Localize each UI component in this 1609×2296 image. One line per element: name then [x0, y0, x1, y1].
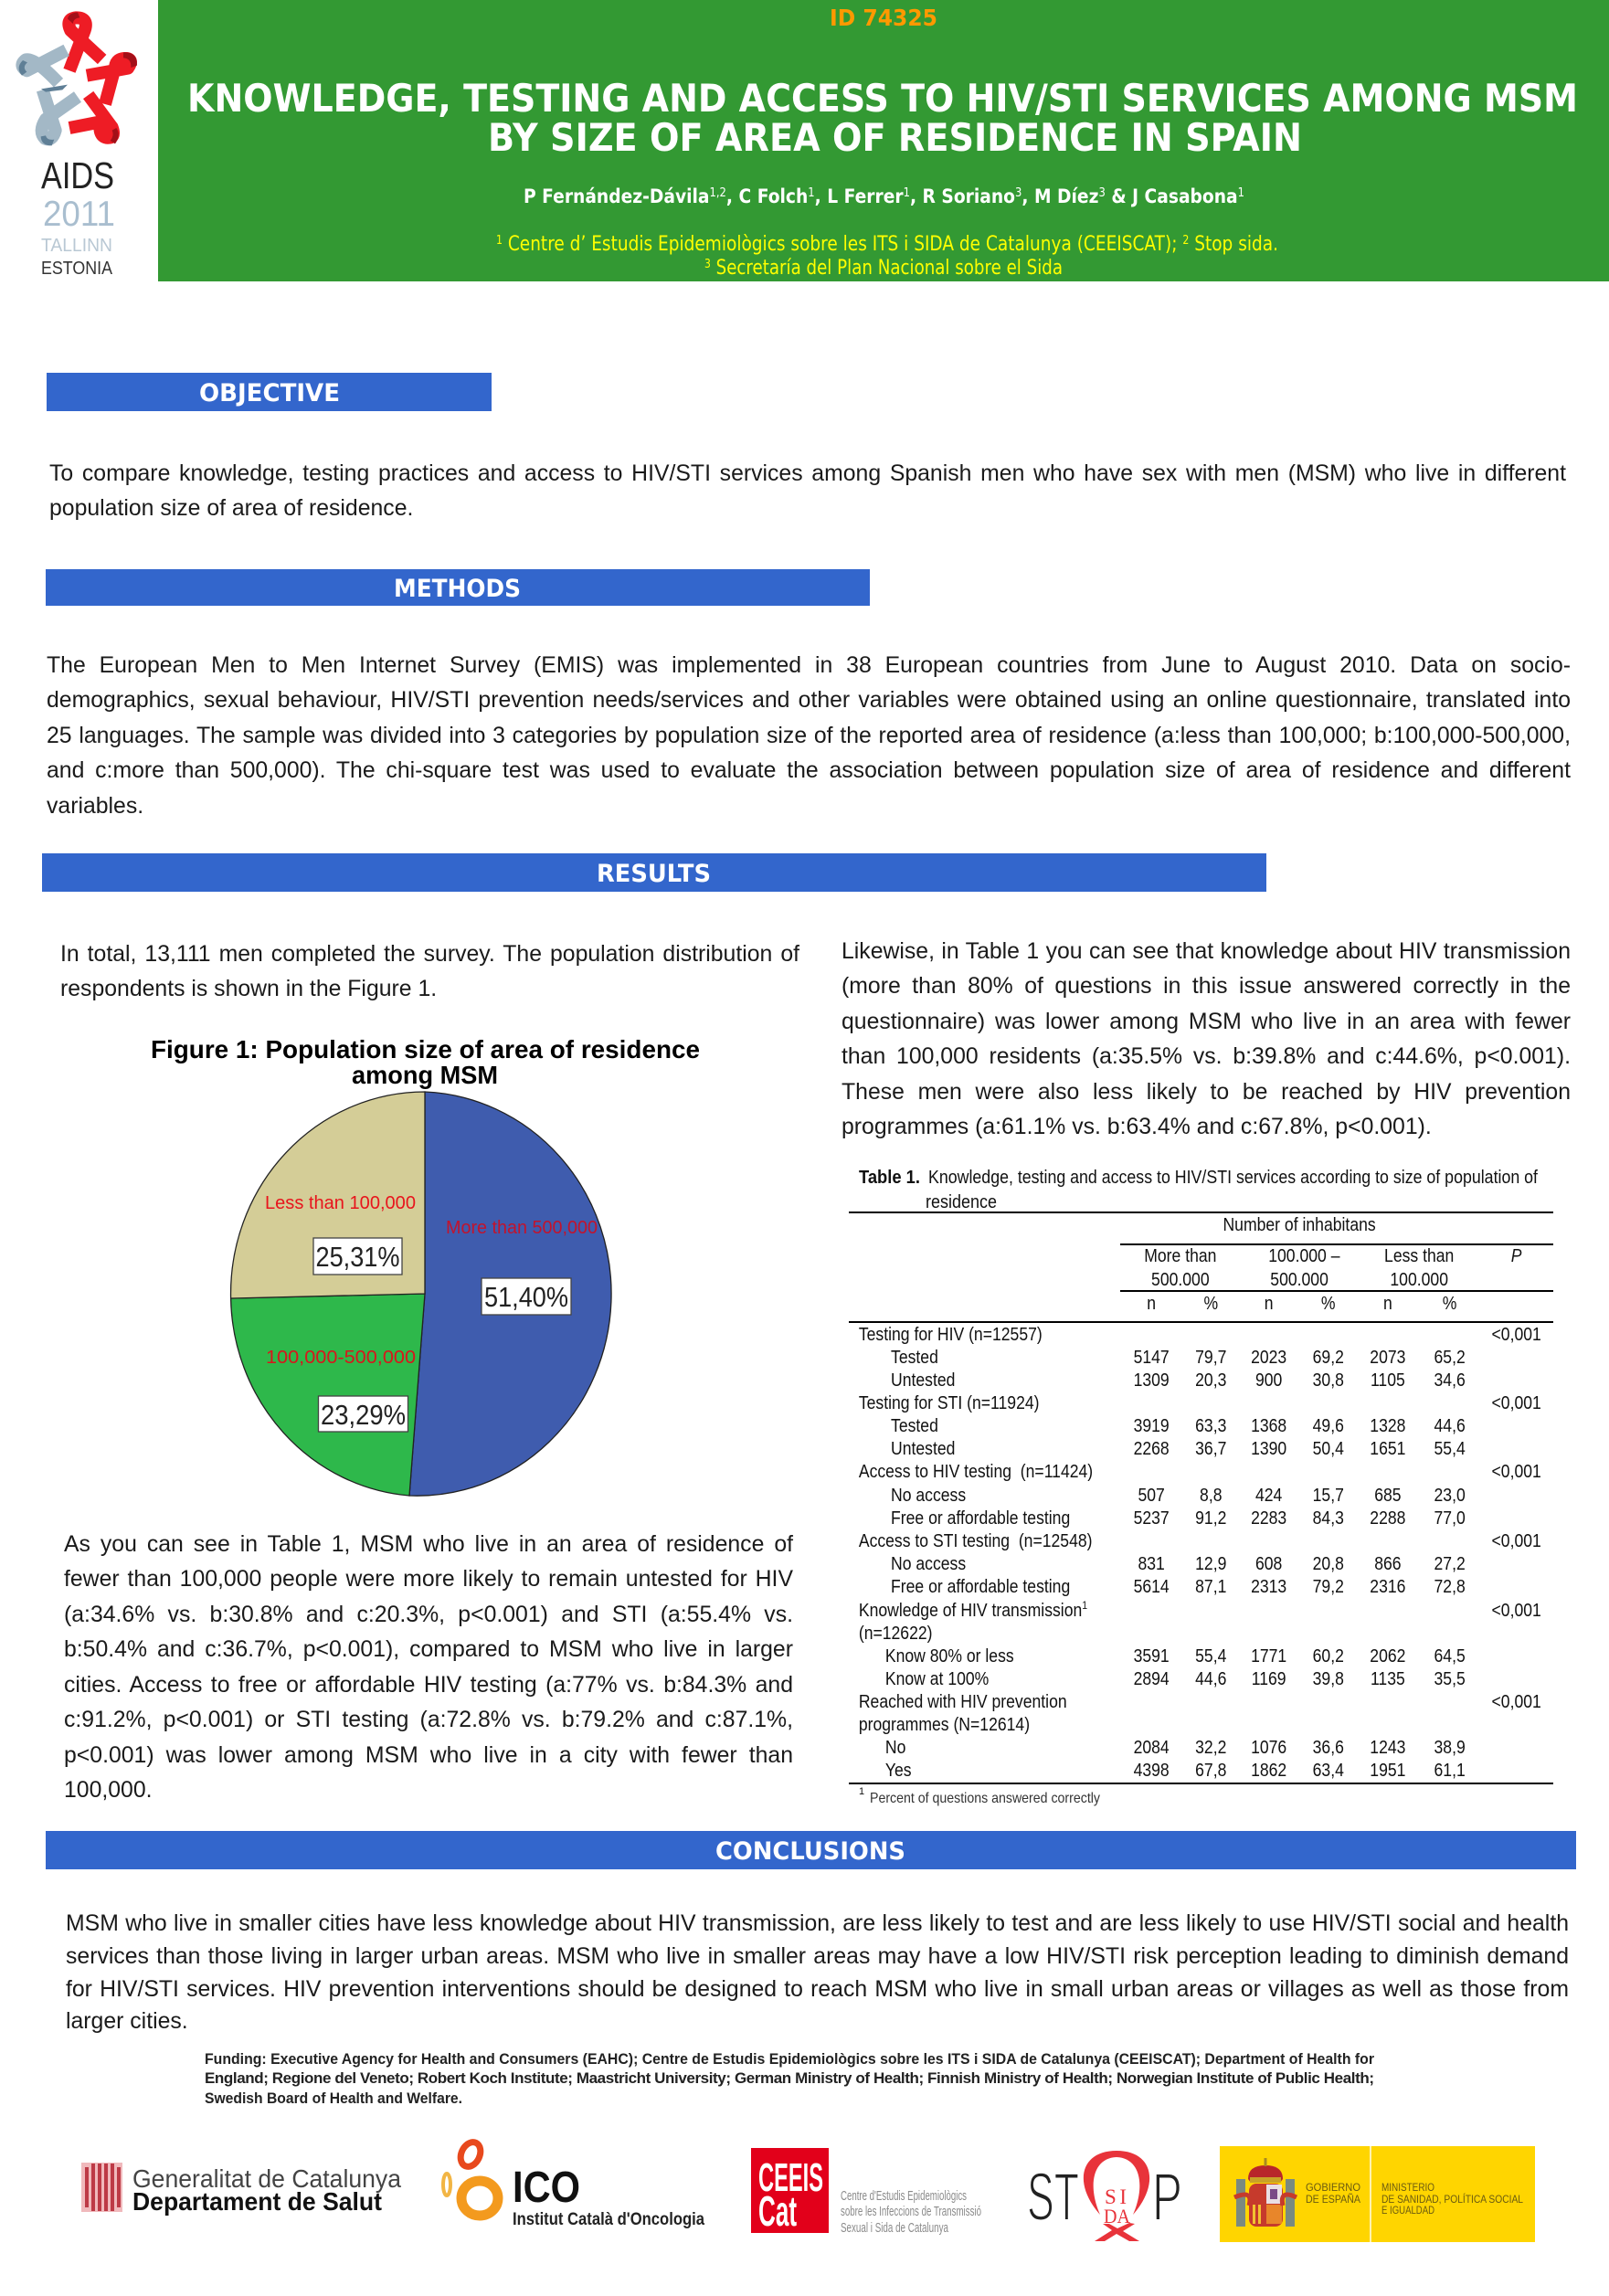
logo text: AIDS: AIDS [41, 154, 114, 196]
column headers: Number of inhabitans [1223, 1214, 1376, 1234]
row group: knowledge of HIV transmission: Know at 100% [885, 1668, 990, 1688]
logo: CEEIS Cat: CEEIS [758, 2155, 823, 2200]
ministry text: GOBIERNO [1306, 2181, 1360, 2194]
authors: & J Casabona [1106, 185, 1238, 207]
text: conclusions [66, 1911, 1569, 2034]
table footnote: 1 [859, 1786, 864, 1797]
row group: knowledge of HIV transmission: 44,6 [1195, 1668, 1226, 1688]
row group: access to HIV testing: 91,2 [1195, 1508, 1226, 1528]
icon: Catalan flag stripes [81, 2163, 122, 2212]
text: results testing and access: p<0.001) was lower among MSM who live in a city with fewer than [64, 1743, 793, 1768]
row group: access to HIV testing: Access to HIV testing (n=11424) [859, 1461, 1093, 1481]
text: methods: and c:more than 500,000). The chi-square test was used to evaluate the association between population size of area of residence and different [47, 758, 1571, 783]
header banner [158, 0, 1609, 281]
logo: Gobierno de España [1220, 2146, 1535, 2242]
row group: knowledge of HIV transmission: (n=12622) [859, 1623, 933, 1643]
row group: testing for HIV: 20,3 [1195, 1370, 1226, 1390]
ministry text: MINISTERIO [1381, 2181, 1434, 2194]
row group: testing for HIV: 2073 [1370, 1347, 1405, 1367]
table caption: Knowledge, testing and access to HIV/STI services according to size of population of [928, 1168, 1538, 1188]
text: objective: population size of area of residence. [49, 496, 413, 521]
affiliations: Stop sida. [1189, 233, 1278, 256]
chart title: among MSM [352, 1061, 498, 1089]
row group: testing for STI: 1328 [1370, 1415, 1405, 1435]
text: results knowledge: (more than 80% of questions in this issue answered correctly in the [842, 974, 1571, 999]
column headers: n [1383, 1293, 1392, 1313]
row group: access to STI testing [859, 1530, 1541, 1596]
table footnote [859, 1786, 1100, 1806]
row group: testing for STI: 44,6 [1434, 1415, 1466, 1435]
column headers: 100.000 – [1268, 1245, 1340, 1265]
heading: methods [46, 569, 870, 606]
text: results testing and access: 100,000. [64, 1778, 153, 1803]
row group: testing for HIV: Testing for HIV (n=12557) [859, 1324, 1043, 1344]
row group: access to HIV testing: 8,8 [1200, 1485, 1223, 1505]
logo caption [841, 2188, 981, 2236]
row group: access to STI testing: 2313 [1251, 1576, 1286, 1596]
row group: testing for STI: 63,3 [1195, 1415, 1226, 1435]
authors: 1 [808, 186, 815, 200]
column headers: 500.000 [1270, 1269, 1328, 1289]
text: methods [47, 653, 1571, 819]
title [187, 76, 1578, 160]
row group: access to STI testing: 866 [1374, 1553, 1402, 1573]
value box: 51,40%: 51,40% [484, 1281, 568, 1313]
ministry text: E IGUALDAD [1381, 2204, 1434, 2217]
title: BY SIZE OF AREA OF RESIDENCE IN SPAIN [488, 115, 1302, 160]
heading: results [42, 853, 1266, 892]
row group: access to STI testing: 27,2 [1434, 1553, 1466, 1573]
row group: knowledge of HIV transmission: 2062 [1370, 1645, 1405, 1666]
text: results knowledge: questionnaire) was lower among MSM who live in an area with fewer [842, 1010, 1571, 1034]
logo text: Tallinn: TALLINN [41, 236, 112, 256]
row group: testing for STI: 49,6 [1313, 1415, 1344, 1435]
row group: knowledge of HIV transmission: Know 80% or less [885, 1645, 1014, 1666]
text: objective [49, 461, 1566, 521]
funding note: England; Regione del Veneto; Robert Koch Institute; Maastricht University; German Ministry of Health; Finnish Ministry of Health; Norwegian Institute of Public Health; [205, 2069, 1374, 2087]
authors: , R Soriano [910, 185, 1015, 207]
row group: reached with HIV prevention programmes: 1243 [1370, 1737, 1405, 1757]
text: results testing and access [64, 1532, 793, 1803]
logo text: 2011: 2011 [43, 195, 115, 234]
row group: testing for HIV: 900 [1255, 1370, 1282, 1390]
row group: testing for STI: 2268 [1134, 1438, 1170, 1458]
text: results intro: In total, 13,111 men completed the survey. The population distribution of [60, 942, 799, 967]
logo: AIDS 2011 Tallinn Estonia [19, 12, 137, 279]
table footnote: Percent of questions answered correctly [870, 1791, 1100, 1806]
row group: access to HIV testing: No access [891, 1485, 966, 1505]
text: results testing and access: cities. Access to free or affordable HIV testing (a:77% vs. b:84.3% and [64, 1673, 793, 1698]
text: conclusions: MSM who live in smaller cities have less knowledge about HIV transmission, are less likely to test and are less likely to use HIV/STI social and health [66, 1911, 1569, 1936]
row group: access to STI testing: 2316 [1370, 1576, 1405, 1596]
icon: ribbon cross [1095, 2223, 1139, 2241]
slice label: less than 100,000: Less than 100,000 [265, 1193, 416, 1213]
conference ID: ID 74325 [830, 5, 937, 31]
row group: access to HIV testing: 2288 [1370, 1508, 1405, 1528]
text: methods: 25 languages. The sample was divided into 3 categories by population size of the reported area of residence (a:less than 100,000; b:100,000-500,000, [47, 724, 1571, 748]
icon: red ribbon O [1084, 2151, 1149, 2215]
funding note: Swedish Board of Health and Welfare. [205, 2090, 462, 2107]
logo: CEEIS Cat [751, 2148, 981, 2236]
text: results testing and access: (a:34.6% vs. b:30.8% and c:20.3%, p<0.001) and STI (a:55.4% vs. [64, 1603, 793, 1627]
text: results knowledge: These men were also less likely to be reached by HIV prevention [842, 1080, 1571, 1105]
text: methods: demographics, sexual behaviour, HIV/STI prevention needs/services and other variables were obtained using an online questionnaire, translated into [47, 688, 1571, 713]
row group: testing for STI [859, 1392, 1541, 1458]
ministry text: DE ESPAÑA [1306, 2193, 1360, 2206]
ministry text [1306, 2181, 1523, 2217]
row group: knowledge of HIV transmission: 55,4 [1195, 1645, 1226, 1666]
row group: access to STI testing: 20,8 [1313, 1553, 1344, 1573]
authors: , C Folch [726, 185, 808, 207]
column headers: More than [1144, 1245, 1216, 1265]
heading: conclusions [46, 1831, 1576, 1869]
icon: ribbons [19, 12, 137, 145]
row group: access to STI testing: Access to STI testing (n=12548) [859, 1530, 1093, 1550]
row group: knowledge of HIV transmission: Knowledge of HIV transmission [859, 1600, 1082, 1620]
row group: access to STI testing: 79,2 [1313, 1576, 1344, 1596]
logo: Stop Sida: ST [1027, 2159, 1079, 2235]
row group: access to STI testing: 831 [1138, 1553, 1165, 1573]
row group: knowledge of HIV transmission: 35,5 [1434, 1668, 1466, 1688]
funding note [205, 2050, 1374, 2107]
logo: Stop Sida: P [1152, 2159, 1182, 2235]
column headers: n [1147, 1293, 1156, 1313]
row group: knowledge of HIV transmission: 39,8 [1313, 1668, 1344, 1688]
text: results knowledge [842, 939, 1571, 1139]
row group: testing for STI: 1390 [1251, 1438, 1286, 1458]
pie slice: 100,000-500,000 [231, 1294, 425, 1496]
value box: 25,31%: 25,31% [316, 1241, 400, 1273]
column headers: n [1265, 1293, 1274, 1313]
row group: testing for STI: <0,001 [1492, 1392, 1541, 1413]
affiliations: 1 [496, 234, 503, 248]
text: conclusions: larger cities. [66, 2009, 188, 2034]
row group: reached with HIV prevention programmes [859, 1691, 1541, 1780]
row group: access to HIV testing: 507 [1138, 1485, 1165, 1505]
row group: testing for HIV: 1309 [1134, 1370, 1170, 1390]
row group: testing for HIV: 2023 [1251, 1347, 1286, 1367]
row group: knowledge of HIV transmission: 1771 [1251, 1645, 1286, 1666]
column headers: P [1511, 1245, 1522, 1265]
logo: ICO Institut Català d'Oncologia: Institut Català d'Oncologia [513, 2210, 704, 2229]
chart title [151, 1035, 700, 1089]
table caption: Table 1. [859, 1168, 920, 1188]
text: methods: The European Men to Men Internet Survey (EMIS) was implemented in 38 European countries from June to August 2010. Data on socio- [47, 653, 1571, 678]
row group: knowledge of HIV transmission: 60,2 [1313, 1645, 1344, 1666]
row group: knowledge of HIV transmission: 64,5 [1434, 1645, 1466, 1666]
row group: access to STI testing: <0,001 [1492, 1530, 1541, 1550]
table 1 [849, 1168, 1553, 1806]
row group: access to HIV testing: 23,0 [1434, 1485, 1466, 1505]
row group: access to HIV testing [859, 1461, 1541, 1528]
logo: ICO Institut Català d'Oncologia: ICO [513, 2164, 580, 2212]
text: results testing and access: As you can see in Table 1, MSM who live in an area of residence of [64, 1532, 793, 1557]
row group: reached with HIV prevention programmes: 32,2 [1195, 1737, 1226, 1757]
heading: results: RESULTS [597, 860, 711, 888]
row group: reached with HIV prevention programmes: 4398 [1134, 1760, 1170, 1780]
row group: reached with HIV prevention programmes: 67,8 [1195, 1760, 1226, 1780]
row group: knowledge of HIV transmission: 1 [1082, 1600, 1087, 1612]
affiliations: Centre d’ Estudis Epidemiològics sobre les ITS i SIDA de Catalunya (CEEISCAT); [503, 233, 1182, 256]
text: objective: To compare knowledge, testing practices and access to HIV/STI services among Spanish men who have sex with men (MSM) who live in different [49, 461, 1566, 486]
ministry text: DE SANIDAD, POLÍTICA SOCIAL [1381, 2192, 1523, 2206]
row group: testing for HIV: 65,2 [1434, 1347, 1466, 1367]
row group: access to STI testing: 5614 [1134, 1576, 1170, 1596]
pie slice: more than 500,000 [409, 1092, 611, 1496]
row group: testing for STI: 1651 [1370, 1438, 1405, 1458]
authors: , M Díez [1022, 185, 1098, 207]
row group: access to HIV testing: Free or affordable testing [891, 1508, 1070, 1528]
row group: reached with HIV prevention programmes: programmes (N=12614) [859, 1714, 1030, 1734]
banner background [158, 0, 1609, 281]
row group: access to HIV testing: 685 [1374, 1485, 1402, 1505]
logo: Generalitat de Catalunya: Departament de Salut [132, 2187, 382, 2216]
text: results testing and access: c:91.2%, p<0.001) or STI testing (a:72.8% vs. b:79.2% and c:87.1%, [64, 1708, 793, 1732]
pie slice: less than 100,000 [231, 1092, 425, 1298]
chart title: Figure 1: Population size of area of residence [151, 1035, 700, 1063]
figure 1: pie chart [151, 1035, 700, 1496]
row group: knowledge of HIV transmission: 2894 [1134, 1668, 1170, 1688]
row group: access to HIV testing: 5237 [1134, 1508, 1170, 1528]
row group: access to STI testing: No access [891, 1553, 966, 1573]
row group: knowledge of HIV transmission: 3591 [1134, 1645, 1170, 1666]
row group: reached with HIV prevention programmes: 1076 [1251, 1737, 1286, 1757]
text: conclusions: for HIV/STI services. HIV prevention interventions should be designed to reach MSM who live in small urban areas or villages as well as those from [66, 1977, 1569, 2002]
authors: 3 [1098, 186, 1106, 200]
logo: Stop Sida: SI [1105, 2185, 1127, 2208]
text: methods: variables. [47, 794, 143, 819]
row group: testing for HIV: Untested [891, 1370, 955, 1390]
funding note: Funding: Executive Agency for Health and Consumers (EAHC); Centre de Estudis Epidemiològics sobre les ITS i SIDA de Catalunya (CEEISCAT); Department of Health for [205, 2050, 1374, 2068]
row group: testing for STI: 50,4 [1313, 1438, 1344, 1458]
row group: access to HIV testing: 424 [1255, 1485, 1282, 1505]
slice label: more than 500,000: More than 500,000 [446, 1218, 598, 1238]
column headers: % [1443, 1293, 1457, 1313]
row group: access to HIV testing: 2283 [1251, 1508, 1286, 1528]
row group: access to STI testing: 608 [1255, 1553, 1282, 1573]
row group: testing for STI: 36,7 [1195, 1438, 1226, 1458]
row group: reached with HIV prevention programmes: No [885, 1737, 905, 1757]
row group: reached with HIV prevention programmes: 2084 [1134, 1737, 1170, 1757]
row group: testing for STI: Testing for STI (n=11924) [859, 1392, 1040, 1413]
text: results testing and access: fewer than 100,000 people were more likely to remain untested for HIV [64, 1567, 793, 1592]
value box: 23,29%: 23,29% [321, 1399, 406, 1431]
table caption [859, 1168, 1538, 1212]
row group: reached with HIV prevention programmes: 36,6 [1313, 1737, 1344, 1757]
row group: knowledge of HIV transmission: 1135 [1371, 1668, 1405, 1688]
text: results knowledge: programmes (a:61.1% vs. b:63.4% and c:67.8%, p<0.001). [842, 1115, 1432, 1139]
text: results intro: respondents is shown in the Figure 1. [60, 977, 437, 1001]
heading: objective: OBJECTIVE [199, 379, 340, 407]
affiliations: Secretaría del Plan Nacional sobre el Sida [711, 257, 1063, 280]
row group: testing for STI: 1368 [1251, 1415, 1286, 1435]
table caption: residence [926, 1192, 997, 1212]
heading: objective [47, 373, 492, 411]
authors: 3 [1015, 186, 1022, 200]
authors: 1,2 [710, 186, 726, 200]
icon: ICO rings [443, 2139, 498, 2216]
row group: reached with HIV prevention programmes: 63,4 [1313, 1760, 1344, 1780]
row group: testing for HIV: 34,6 [1434, 1370, 1466, 1390]
authors: , L Ferrer [815, 185, 904, 207]
logo caption: Centre d'Estudis Epidemiològics [841, 2188, 967, 2204]
row group: access to HIV testing: 77,0 [1434, 1508, 1466, 1528]
row group: testing for HIV: 1105 [1371, 1370, 1405, 1390]
row group: testing for HIV: 5147 [1134, 1347, 1170, 1367]
logo: CEEIS Cat: Cat [758, 2187, 797, 2235]
row group: testing for HIV [859, 1324, 1541, 1390]
column headers: Less than [1384, 1245, 1454, 1265]
row group: reached with HIV prevention programmes: 1951 [1370, 1760, 1405, 1780]
row group: testing for HIV: 79,7 [1195, 1347, 1226, 1367]
row group: testing for HIV: 30,8 [1313, 1370, 1344, 1390]
authors: 1 [1238, 186, 1244, 200]
column headers: 100.000 [1390, 1269, 1448, 1289]
text: results knowledge: than 100,000 residents (a:35.5% vs. b:39.8% and c:44.6%, p<0.001). [842, 1044, 1571, 1069]
row group: knowledge of HIV transmission [859, 1600, 1541, 1688]
row group: reached with HIV prevention programmes: Yes [885, 1760, 912, 1780]
row group: testing for HIV: <0,001 [1492, 1324, 1541, 1344]
column headers [1144, 1214, 1522, 1313]
affiliations: 2 [1182, 234, 1189, 248]
row group: reached with HIV prevention programmes: 38,9 [1434, 1737, 1466, 1757]
row group: reached with HIV prevention programmes: <0,001 [1492, 1691, 1541, 1711]
row group: access to HIV testing: 15,7 [1313, 1485, 1344, 1505]
logo caption: sobre les Infeccions de Transmissió [841, 2204, 981, 2219]
affiliations: 3 [704, 258, 711, 271]
authors: 1 [904, 186, 910, 200]
row group: access to STI testing: Free or affordable testing [891, 1576, 1070, 1596]
column headers: % [1321, 1293, 1336, 1313]
row group: access to STI testing: 87,1 [1195, 1576, 1226, 1596]
logo: Generalitat de Catalunya [81, 2163, 401, 2216]
row group: testing for STI: 55,4 [1434, 1438, 1466, 1458]
row group: access to STI testing: 72,8 [1434, 1576, 1466, 1596]
slice label: 100,000-500,000: 100,000-500,000 [266, 1348, 416, 1368]
authors: P Fernández-Dávila [524, 185, 733, 207]
text: conclusions: services than those living in larger urban areas. MSM who live in smaller areas may have a low HIV/STI risk perception leading to diminish demand [66, 1944, 1569, 1969]
row group: access to HIV testing: <0,001 [1492, 1461, 1541, 1481]
heading: methods: METHODS [394, 575, 521, 603]
row group: access to HIV testing: 84,3 [1313, 1508, 1344, 1528]
logo: Generalitat de Catalunya: Generalitat de Catalunya [132, 2164, 401, 2193]
row group: access to STI testing: 12,9 [1195, 1553, 1226, 1573]
row group: testing for STI: Untested [891, 1438, 955, 1458]
text: results testing and access: b:50.4% and c:36.7%, p<0.001), compared to MSM who live in larger [64, 1637, 793, 1662]
logo caption: Sexual i Sida de Catalunya [841, 2220, 948, 2236]
row group: reached with HIV prevention programmes: 1862 [1251, 1760, 1286, 1780]
row group: knowledge of HIV transmission: <0,001 [1492, 1600, 1541, 1620]
row group: reached with HIV prevention programmes: 61,1 [1434, 1760, 1466, 1780]
row group: testing for STI: Tested [891, 1415, 938, 1435]
text: results intro [60, 942, 800, 1001]
logo: ICO Institut Català d'Oncologia [443, 2139, 704, 2229]
table body [859, 1214, 1541, 1780]
logo: Stop Sida: DA [1104, 2205, 1130, 2227]
row group: testing for HIV: 69,2 [1313, 1347, 1344, 1367]
column headers: % [1203, 1293, 1218, 1313]
logo: Stop Sida [1027, 2151, 1182, 2241]
text: results knowledge: Likewise, in Table 1 you can see that knowledge about HIV transmission [842, 939, 1571, 964]
row group: knowledge of HIV transmission: 1169 [1252, 1668, 1286, 1688]
icon: coat of arms [1234, 2158, 1297, 2227]
column headers: 500.000 [1151, 1269, 1210, 1289]
row group: testing for HIV: Tested [891, 1347, 938, 1367]
row group: testing for STI: 3919 [1134, 1415, 1170, 1435]
affiliations [496, 233, 1278, 280]
logo text: Estonia: ESTONIA [41, 259, 113, 279]
row group: reached with HIV prevention programmes: Reached with HIV prevention [859, 1691, 1067, 1711]
heading: conclusions: CONCLUSIONS [715, 1837, 905, 1866]
